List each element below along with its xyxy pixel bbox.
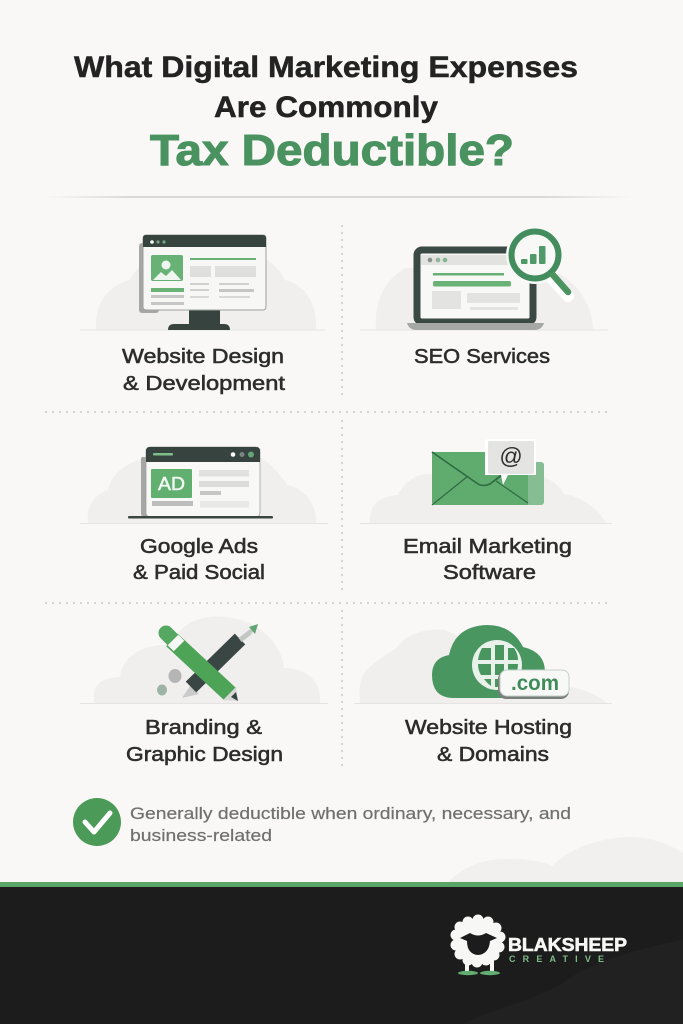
cloud backdrop	[96, 247, 316, 330]
note text: business-related	[130, 826, 272, 845]
label: Email Marketing	[403, 536, 572, 558]
panel: google ads	[80, 447, 328, 584]
panel: email marketing	[360, 439, 612, 584]
note text: Generally deductible when ordinary, necessary, and	[130, 804, 571, 823]
icon: ad browser window: AD	[158, 474, 185, 494]
note text	[130, 804, 571, 845]
title: Tax Deductible?	[150, 126, 514, 175]
title: Are Commonly	[214, 91, 438, 124]
panel: seo services	[360, 226, 608, 368]
title: What Digital Marketing Expenses	[74, 51, 578, 84]
icon: ad browser window	[128, 447, 273, 518]
cloud backdrop	[359, 630, 606, 703]
panel: hosting	[354, 625, 612, 766]
label: Branding &	[145, 717, 263, 739]
icon: check mark	[73, 798, 121, 846]
label	[133, 536, 265, 584]
label	[403, 536, 572, 584]
icon: sheep	[450, 914, 506, 975]
icon: envelope with at-sign bubble	[432, 439, 544, 505]
label: & Paid Social	[133, 562, 265, 584]
logo: blaksheep creative	[450, 914, 627, 975]
cloud backdrop	[94, 617, 320, 703]
footer band	[0, 882, 683, 1024]
icon: cloud with globe and .com	[432, 625, 569, 699]
icon: laptop with magnifier	[407, 226, 568, 330]
panel: branding	[80, 617, 328, 766]
label	[122, 346, 286, 395]
title	[74, 51, 578, 175]
panel: website design	[80, 235, 325, 395]
label	[405, 717, 572, 766]
label: Software	[443, 562, 536, 584]
icon: monitor	[139, 235, 266, 330]
label: & Development	[123, 373, 286, 395]
label	[126, 717, 283, 766]
label: Graphic Design	[126, 744, 283, 766]
label: & Domains	[437, 744, 549, 766]
cloud backdrop	[370, 474, 606, 523]
label: SEO Services	[414, 346, 550, 368]
label: Website Hosting	[405, 717, 572, 739]
icon: envelope with at-sign bubble: @	[499, 443, 523, 469]
callout: deductible note	[73, 798, 571, 846]
icon: cloud with globe and .com: .com	[511, 672, 559, 695]
label: Google Ads	[140, 536, 258, 558]
label: Website Design	[122, 346, 284, 368]
cloud backdrop	[88, 458, 316, 523]
cloud backdrop	[376, 268, 593, 330]
logo: blaksheep creative: BLAKSHEEP	[508, 935, 627, 955]
icon: crossed pens	[157, 624, 258, 701]
logo: blaksheep creative: CREATIVE	[509, 954, 604, 964]
